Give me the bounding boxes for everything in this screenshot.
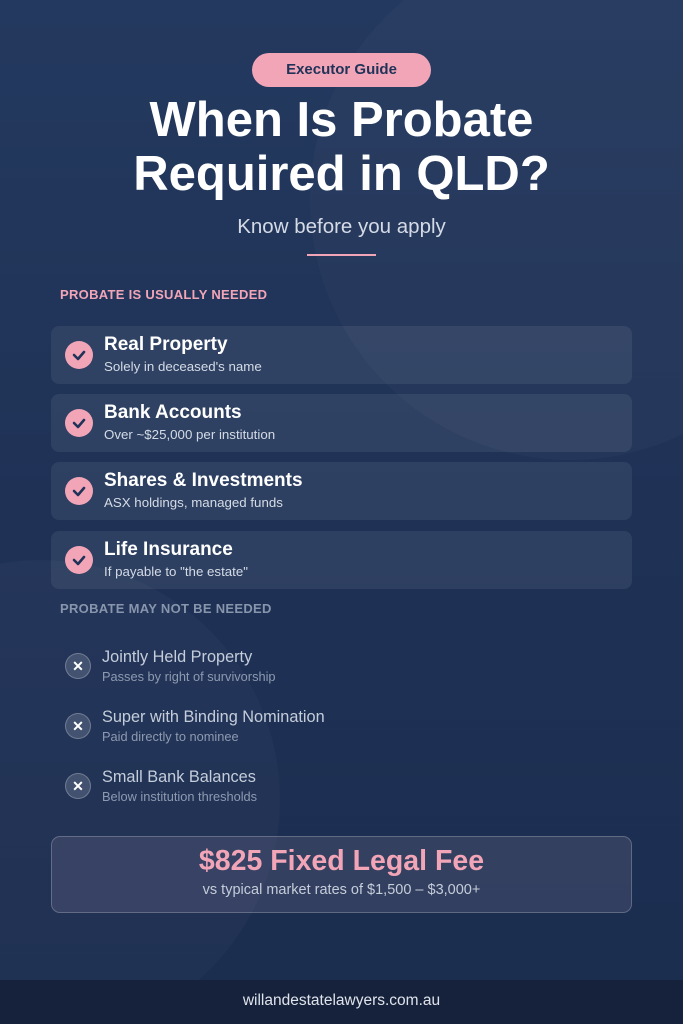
- icon: x: ✕: [72, 718, 84, 734]
- icon: x: [65, 713, 91, 739]
- divider: [307, 254, 376, 256]
- card: Real Property: Solely in deceased's name: [104, 359, 262, 374]
- item: Jointly Held: [65, 648, 276, 684]
- item: Super: [65, 708, 325, 744]
- icon: x: [65, 653, 91, 679]
- icon: check: [65, 546, 93, 574]
- icon: x: ✕: [72, 778, 84, 794]
- callout: fee: $825 Fixed Legal Fee: [199, 845, 484, 877]
- card: Life Insurance: Life Insurance: [104, 539, 233, 560]
- icon: x: [65, 773, 91, 799]
- card: Life Insurance: If payable to "the estate": [104, 564, 248, 579]
- subtitle: Know before you apply: [237, 215, 446, 238]
- footer: [0, 980, 683, 1024]
- card: Bank Accounts: [51, 394, 632, 452]
- card: Life Insurance: [51, 531, 632, 589]
- item: Super: Super with Binding Nomination: [102, 708, 325, 726]
- card: Shares: Shares & Investments: [104, 470, 303, 491]
- title: [133, 93, 550, 201]
- callout: fee: [51, 836, 632, 913]
- item: Super: Paid directly to nominee: [102, 729, 239, 744]
- title: Required in QLD?: [133, 147, 550, 201]
- badge: Executor Guide: Executor Guide: [286, 61, 397, 78]
- item: Small Bank: Below institution thresholds: [102, 789, 257, 804]
- card: Real Property: Real Property: [104, 334, 228, 355]
- badge: Executor Guide: [252, 53, 431, 87]
- heading: may not be needed: PROBATE MAY NOT BE NEEDED: [60, 601, 272, 616]
- item: Small Bank: Small Bank Balances: [102, 768, 256, 786]
- card: Bank Accounts: Over ~$25,000 per institution: [104, 427, 275, 442]
- item: Jointly Held: Passes by right of survivorship: [102, 669, 276, 684]
- title: When Is Probate: [150, 93, 533, 147]
- card: Bank Accounts: Bank Accounts: [104, 402, 242, 423]
- card: Real Property: [51, 326, 632, 384]
- icon: x: ✕: [72, 658, 84, 674]
- callout: fee: vs typical market rates of $1,500 – $3,000+: [203, 882, 480, 898]
- card: Shares: ASX holdings, managed funds: [104, 495, 283, 510]
- icon: check: [65, 477, 93, 505]
- icon: check: [65, 341, 93, 369]
- heading: probate usually needed: PROBATE IS USUALLY NEEDED: [60, 287, 267, 302]
- item: Jointly Held: Jointly Held Property: [102, 648, 252, 666]
- card: Shares: [51, 462, 632, 520]
- footer: willandestatelawyers.com.au: [243, 992, 440, 1009]
- icon: check: [65, 409, 93, 437]
- item: Small Bank: [65, 768, 257, 804]
